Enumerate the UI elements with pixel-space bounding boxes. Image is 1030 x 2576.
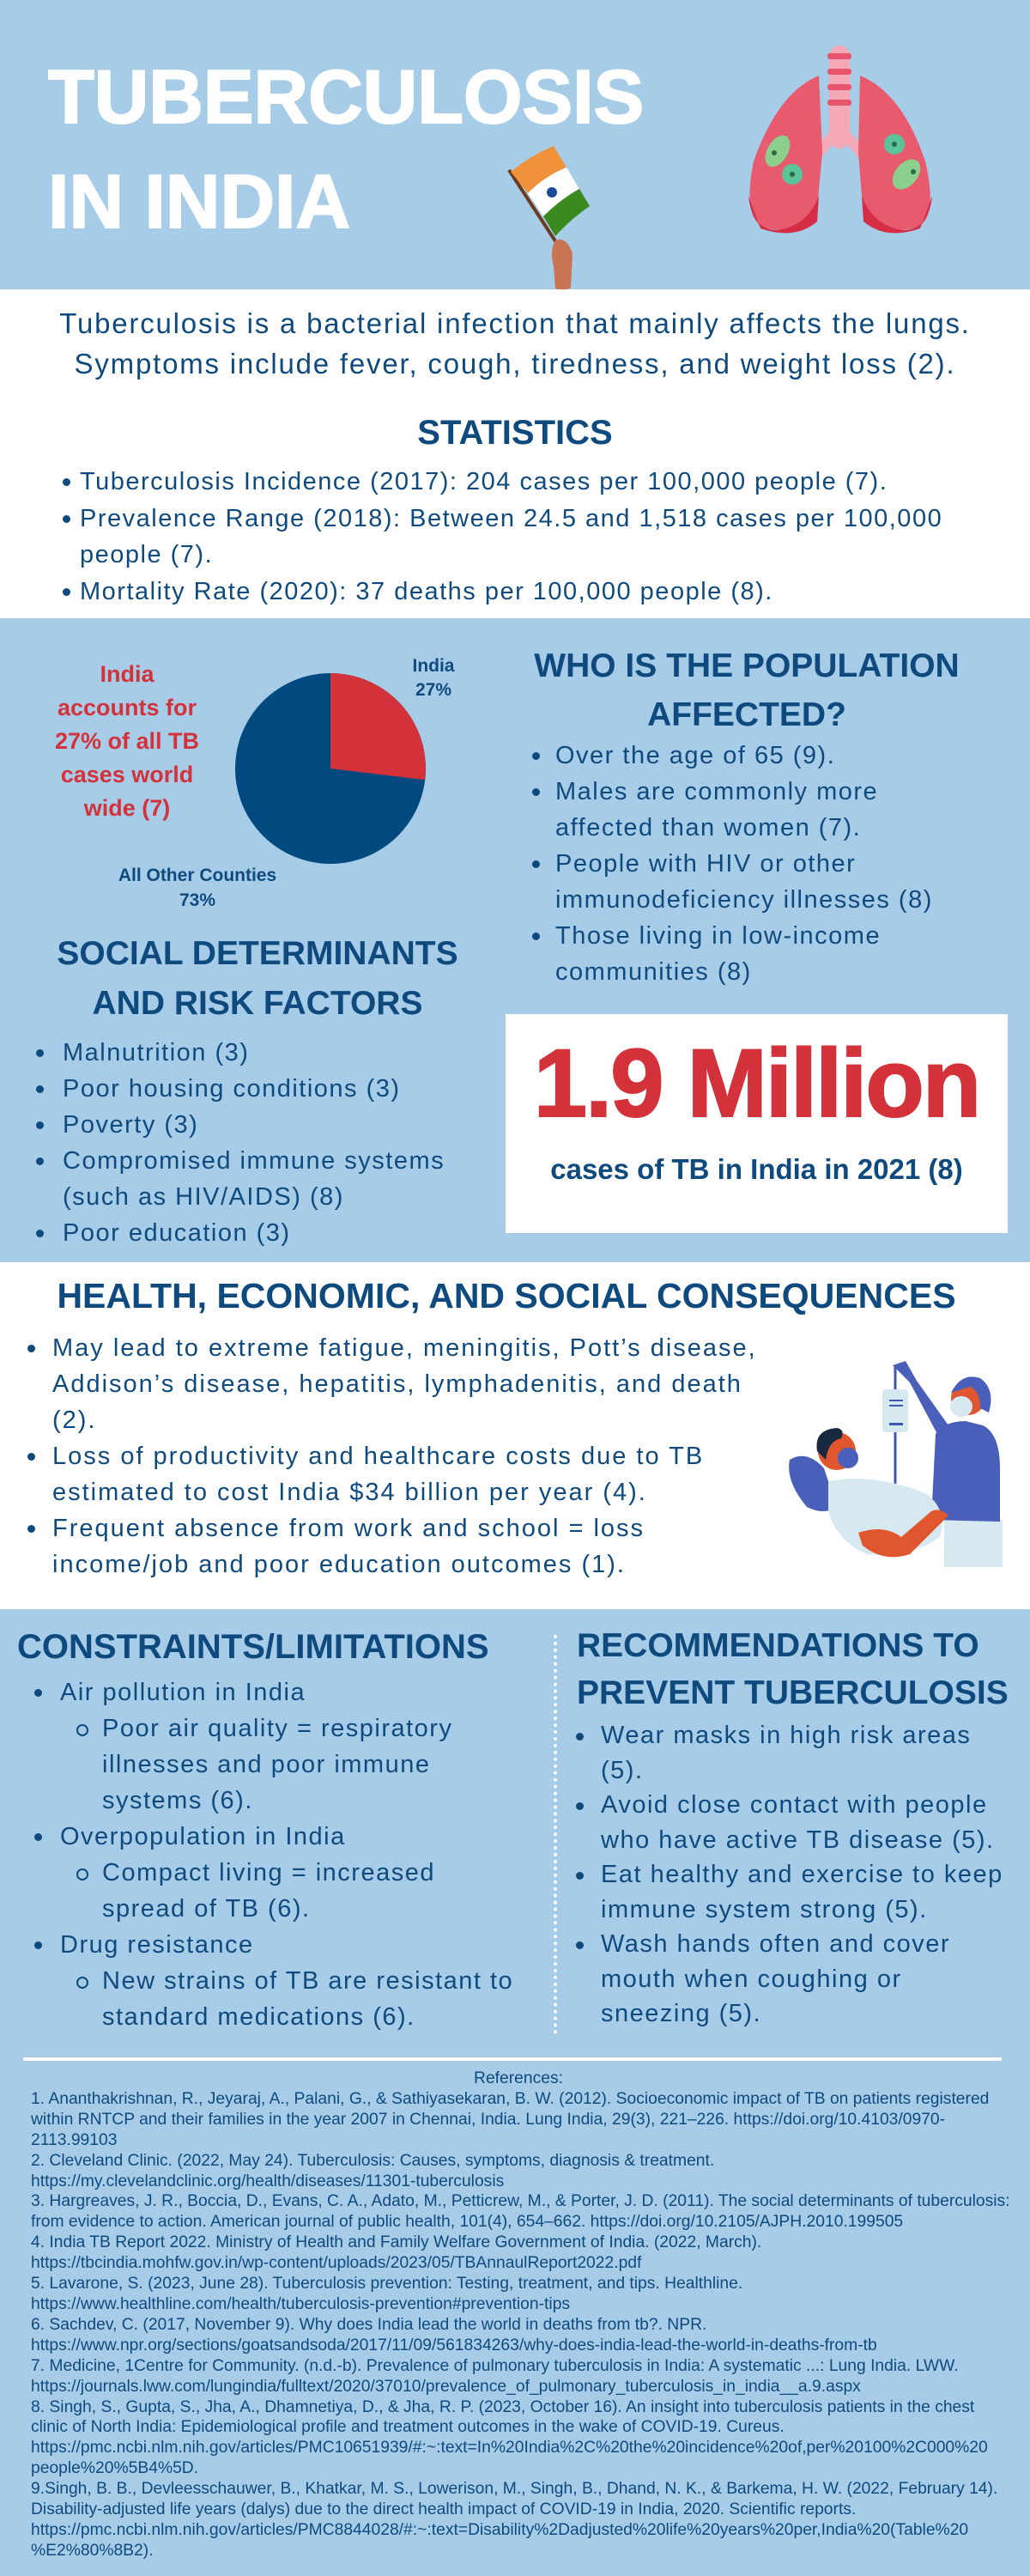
divider line [23, 2057, 1002, 2061]
list: recommendations: Avoid close contact with people [601, 1791, 988, 1819]
callout caption: cases of TB in India in 2021 (8) [550, 1153, 963, 1185]
list: population affected: immunodeficiency illnesses (8) [555, 886, 933, 914]
title: TUBERCULOSIS [48, 54, 644, 139]
references: https://pmc.ncbi.nlm.nih.gov/articles/PMC8844028/#:~:text=Disability%2Dadjusted%20life%20years%20per,India%20(Table%20 [31, 2521, 968, 2539]
references: 4. India TB Report 2022. Ministry of Health and Family Welfare Government of India. (2022, March). [31, 2233, 761, 2251]
list: recommendations: mouth when coughing or [601, 1965, 902, 1992]
heading: recommendations: RECOMMENDATIONS TO [577, 1627, 979, 1664]
list: population affected: Males are commonly more [555, 778, 878, 805]
references: 8. Singh, S., Gupta, S., Jha, A., Dhamnetiya, D., & Jha, R. P. (2023, October 16). An insight into tuberculosis patients in the chest [31, 2397, 974, 2416]
references: 1. Ananthakrishnan, R., Jeyaraj, A., Palani, G., & Sathiyasekaran, B. W. (2012). Socioeconomic impact of TB on patients registered [31, 2090, 989, 2108]
list: population affected: Those living in low-income [555, 922, 881, 950]
pie callout text: 27% of all TB [55, 728, 199, 754]
heading: social determinants: SOCIAL DETERMINANTS [57, 935, 458, 972]
list: consequences: May lead to extreme fatigue, meningitis, Pott’s disease, [52, 1334, 757, 1362]
heading: social determinants [57, 935, 458, 1022]
statistics list: Tuberculosis Incidence (2017): 204 cases per 100,000 people (7). [80, 468, 888, 495]
list: constraints: standard medications (6). [102, 2003, 415, 2031]
references: https://www.npr.org/sections/goatsandsoda/2017/11/09/561834263/why-does-india-lead-the-world-in-deaths-from-tb [31, 2336, 877, 2354]
white section: consequences [0, 1262, 1030, 1609]
list: constraints: Poor air quality = respiratory [102, 1715, 452, 1742]
references: 2113.99103 [31, 2131, 117, 2149]
list: population affected: affected than women (7). [555, 814, 861, 841]
list: consequences: Addison’s disease, hepatitis, lymphadenitis, and death [52, 1370, 742, 1398]
callout: 1.9 million [506, 1014, 1008, 1233]
list: constraints: illnesses and poor immune [102, 1751, 430, 1778]
pie chart [235, 673, 426, 864]
statistics list: Prevalence Range (2018): Between 24.5 and 1,518 cases per 100,000 [80, 505, 942, 532]
pie label others: All Other Counties [118, 866, 276, 885]
list: risk factors: Malnutrition (3) [63, 1039, 249, 1066]
statistics list: people (7). [80, 541, 213, 568]
references: https://my.clevelandclinic.org/health/diseases/11301-tuberculosis [31, 2172, 504, 2190]
list: recommendations [576, 1722, 1003, 2027]
heading: who is affected: WHO IS THE POPULATION [534, 647, 960, 684]
references: 2. Cleveland Clinic. (2022, May 24). Tuberculosis: Causes, symptoms, diagnosis & treatment. [31, 2152, 714, 2170]
statistics heading: STATISTICS [417, 414, 613, 452]
heading: constraints: CONSTRAINTS/LIMITATIONS [17, 1628, 489, 1666]
list: consequences: estimated to cost India $34 billion per year (4). [52, 1479, 647, 1506]
references: 7. Medicine, 1Centre for Community. (n.d.-b). Prevalence of pulmonary tuberculosis in India: A systematic ...: Lung India. LWW. [31, 2357, 959, 2375]
references: References: [474, 2069, 563, 2087]
references: %E2%80%8B2). [31, 2542, 154, 2560]
list: recommendations: Wear masks in high risk areas [601, 1722, 971, 1749]
pie callout text: India [100, 661, 154, 687]
references: clinic of North India: Epidemiological profile and treatment outcomes in the wake of COVID-19. Cureus. [31, 2418, 785, 2436]
list: consequences: Loss of productivity and healthcare costs due to TB [52, 1443, 704, 1470]
intro text: Symptoms include fever, cough, tiredness, and weight loss (2). [75, 348, 955, 380]
heading: recommendations: PREVENT TUBERCULOSIS [577, 1674, 1009, 1711]
list: consequences: income/job and poor education outcomes (1). [52, 1551, 626, 1578]
divider dotted [554, 1635, 557, 2034]
pie callout text: cases world [61, 762, 193, 787]
list: recommendations: sneezing (5). [601, 2000, 761, 2027]
heading: who is affected [534, 647, 960, 733]
pie label india [412, 656, 455, 700]
list: recommendations: who have active TB disease (5). [601, 1826, 995, 1853]
references: 3. Hargreaves, J. R., Boccia, D., Evans, C. A., Adato, M., Petticrew, M., & Porter, J. D. (2011). The social determinants of tuberculosis: [31, 2192, 1010, 2210]
pie callout text: wide (7) [84, 795, 170, 821]
header band [0, 0, 1030, 289]
references: people%20%5B4%5D. [31, 2459, 198, 2477]
references: 6. Sachdev, C. (2017, November 9). Why does India lead the world in deaths from tb?. NPR. [31, 2316, 706, 2334]
heading: recommendations [577, 1627, 1009, 1711]
heading: consequences: HEALTH, ECONOMIC, AND SOCIAL CONSEQUENCES [57, 1276, 956, 1315]
heading: who is affected: AFFECTED? [647, 696, 846, 733]
list: constraints: Compact living = increased [102, 1859, 435, 1886]
list: risk factors [36, 1039, 445, 1247]
list: recommendations: Wash hands often and cover [601, 1930, 950, 1958]
list: constraints: Overpopulation in India [60, 1823, 346, 1850]
list: population affected: communities (8) [555, 958, 752, 986]
list: constraints [34, 1679, 513, 2031]
blue section: pie, population, determinants, big number [0, 618, 1030, 1262]
illustration: doctor and patient [789, 1361, 1003, 1567]
list: constraints: Drug resistance [60, 1931, 254, 1959]
pie label others: 73% [179, 890, 215, 910]
list: recommendations: (5). [601, 1757, 644, 1784]
references: https://pmc.ncbi.nlm.nih.gov/articles/PMC10651939/#:~:text=In%20India%2C%20the%20incidence%20of,per%20100%2C000%20 [31, 2439, 988, 2457]
intro text [59, 307, 971, 380]
pie callout text: accounts for [58, 695, 197, 720]
references: 5. Lavarone, S. (2023, June 28). Tuberculosis prevention: Testing, treatment, and tips. Healthline. [31, 2275, 742, 2293]
pie label india: 27% [415, 680, 451, 700]
pie callout text [55, 661, 199, 821]
statistics list [63, 468, 942, 605]
list: risk factors: Compromised immune systems [63, 1147, 445, 1175]
list: risk factors: Poor education (3) [63, 1219, 291, 1247]
big number: 1.9 Million [534, 1030, 979, 1137]
pie label india: India [412, 656, 455, 676]
references: 9.Singh, B. B., Devleesschauwer, B., Khatkar, M. S., Lowerison, M., Singh, B., Dhand, N. K., & Barkema, H. W. (2022, February 14). [31, 2480, 997, 2498]
statistics list: Mortality Rate (2020): 37 deaths per 100,000 people (8). [80, 577, 773, 605]
title: IN INDIA [48, 159, 350, 244]
list: population affected: People with HIV or other [555, 850, 856, 878]
references: Disability-adjusted life years (dalys) due to the direct health impact of COVID-19 in India, 2020. Scientific reports. [31, 2500, 856, 2518]
references: from evidence to action. American journal of public health, 101(4), 654–662. https://doi.org/10.2105/AJPH.2010.199505 [31, 2213, 903, 2231]
list: constraints: systems (6). [102, 1787, 253, 1814]
list: constraints: spread of TB (6). [102, 1895, 311, 1923]
references: within RNTCP and their families in the year 2007 in Chennai, India. Lung India, 29(3), 221–226. https://doi.org/10.4103/0970- [31, 2111, 945, 2129]
list: risk factors: Poverty (3) [63, 1111, 198, 1139]
list: constraints: New strains of TB are resistant to [102, 1967, 513, 1995]
references: https://www.healthline.com/health/tuberculosis-prevention#prevention-tips [31, 2295, 570, 2313]
list: population affected: Over the age of 65 (9). [555, 742, 835, 769]
list: constraints: Air pollution in India [60, 1679, 306, 1706]
title [48, 54, 644, 244]
pie label others [118, 866, 276, 910]
white section: intro and statistics [0, 289, 1030, 618]
references: https://tbcindia.mohfw.gov.in/wp-content/uploads/2023/05/TBAnnaulReport2022.pdf [31, 2254, 641, 2272]
list: recommendations: immune system strong (5). [601, 1896, 928, 1923]
list: consequences: (2). [52, 1406, 96, 1434]
list: consequences [27, 1334, 757, 1578]
icon: hand with indian flag [507, 146, 590, 289]
icon: lungs with bacteria [748, 46, 932, 234]
blue section: constraints and recommendations [0, 1609, 1030, 2576]
list: recommendations: Eat healthy and exercise to keep [601, 1861, 1003, 1888]
heading: social determinants: AND RISK FACTORS [93, 985, 422, 1022]
list: risk factors: Poor housing conditions (3) [63, 1075, 401, 1103]
list: consequences: Frequent absence from work and school = loss [52, 1515, 645, 1542]
intro text: Tuberculosis is a bacterial infection that mainly affects the lungs. [59, 307, 971, 339]
list: risk factors: (such as HIV/AIDS) (8) [63, 1183, 344, 1211]
list: population affected [532, 742, 933, 986]
references: https://journals.lww.com/lungindia/fulltext/2020/37010/prevalence_of_pulmonary_tuberculosis_in_india__a.9.aspx [31, 2378, 861, 2396]
references [31, 2069, 1010, 2560]
